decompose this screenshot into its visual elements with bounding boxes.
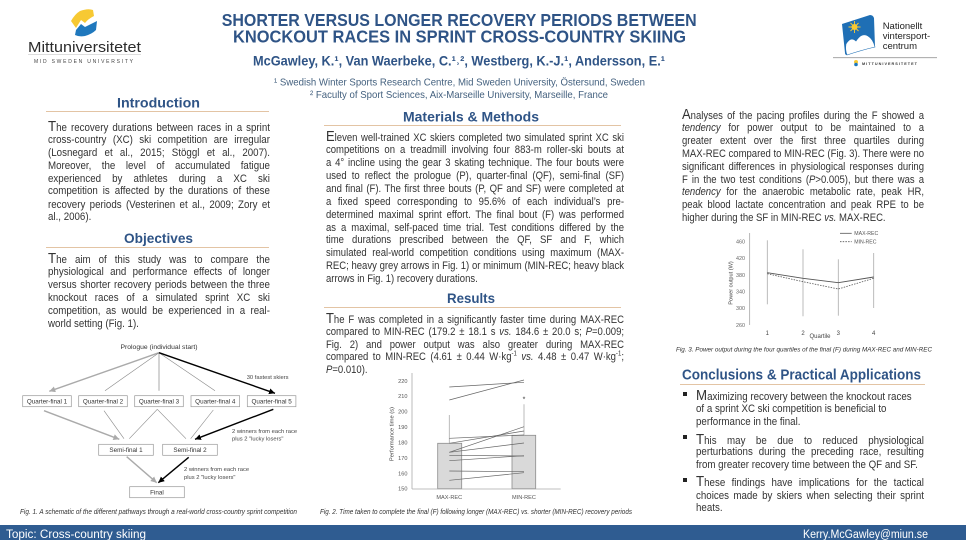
heading: introduction: Introduction	[117, 94, 200, 110]
y axis ticks: 380	[736, 273, 745, 279]
text block: introduction: experienced by athletes during a XC ski	[48, 172, 270, 184]
text block: pacing analysis: tendency for power output to be maintained to a	[682, 122, 924, 134]
individual participant lines	[449, 380, 524, 480]
bullet 1: of a sprint XC ski competition is beneficial to	[696, 403, 886, 415]
x axis labels: 1	[766, 331, 770, 337]
label: winners to semi-finals	[232, 429, 297, 442]
bullet 2: perturbations during the preceding race, resulting	[696, 446, 924, 458]
label: winners to semi-finals: plus 2 "lucky losers"	[232, 436, 283, 442]
bars	[438, 435, 536, 489]
x axis labels: MIN-REC	[512, 495, 536, 501]
legend: MIN-REC	[854, 239, 877, 245]
arrows: semi-finals to final	[127, 457, 189, 483]
text block: pacing analysis: higher during the SF in MIN-REC vs. MAX-REC.	[682, 212, 886, 224]
error bars	[449, 404, 524, 443]
semi-final boxes	[99, 444, 217, 455]
text block: results: P=0.010).	[326, 364, 368, 376]
icon: yellow and blue emblem	[71, 9, 97, 36]
tagline: MID SWEDEN UNIVERSITY	[34, 59, 134, 65]
y axis ticks: 260	[736, 323, 745, 329]
text block: pacing analysis: peak blood lactate concentration and peak RPE to be	[682, 199, 924, 211]
quarter-final labels: Quarter-final 2	[83, 398, 124, 406]
x axis labels: Quartile	[809, 334, 831, 340]
text block: materials and methods: simulated real-world competition conditions using maximum (MAX-	[326, 247, 624, 259]
x axis labels: 2	[801, 331, 805, 337]
text block: introduction: Moreover, the level of accumulated fatigue	[48, 160, 270, 172]
semi-final labels: Semi-final 2	[173, 447, 207, 454]
text block: materials and methods: Eleven well-trained XC skiers completed two simulated sprint XC ski	[326, 128, 624, 145]
header: title, authors and affiliations	[222, 10, 697, 101]
legend: MAX-REC	[854, 231, 878, 237]
affiliations: ² Faculty of Sport Sciences, Aix-Marseille University, Marseille, France	[310, 89, 608, 101]
text block: pacing analysis: greater extent over the first three quartiles during	[682, 135, 924, 147]
y axis ticks: 220	[398, 379, 408, 385]
heading: conclusions: Conclusions & Practical Applications	[682, 368, 921, 384]
title: KNOCKOUT RACES IN SPRINT CROSS-COUNTRY SKIING	[233, 27, 686, 47]
y axis ticks	[398, 379, 408, 493]
label: winners to final: 2 winners from each race	[184, 467, 249, 473]
y axis ticks: 340	[736, 290, 745, 296]
figure 3: power output line chart	[676, 231, 932, 354]
quarter-final boxes	[23, 396, 296, 407]
quarter-final labels: Quarter-final 4	[195, 398, 236, 406]
caption: figure 2: Fig. 2. Time taken to complete the final (F) following longer (MAX-REC) vs. shorter (MIN-REC) recovery periods	[320, 509, 632, 516]
wordmark: centrum	[883, 41, 917, 52]
logo: Mid Sweden University	[28, 9, 141, 65]
bullet 2	[683, 430, 924, 471]
icon: sun over snowy hills	[842, 15, 875, 55]
bullet 2: This may be due to reduced physiological	[696, 430, 924, 448]
text block: introduction: al., 2006).	[48, 211, 91, 223]
text block: materials and methods: determined maximal sprint effort. The final bout (F) was performed	[326, 208, 624, 220]
text block: materials and methods: and final (F). The first three bouts (P, QF and SF) were completed at	[326, 183, 624, 195]
text block: pacing analysis	[682, 106, 924, 224]
text block: materials and methods: REC; heavy grey arrows in Fig. 1) or minimum (MIN-REC; heavy black	[326, 260, 624, 272]
text block: objectives: The aim of this study was to compare the	[48, 250, 270, 267]
quarter-final labels: Quarter-final 5	[251, 398, 292, 406]
bullet 3	[683, 473, 924, 514]
y axis ticks: 200	[398, 410, 408, 416]
panel: introduction	[46, 94, 270, 223]
prologue label: Prologue (individual start)	[120, 344, 198, 351]
affiliations	[274, 76, 645, 101]
text block: objectives	[48, 250, 270, 330]
final box: Final	[150, 490, 164, 497]
y axis ticks: 210	[398, 394, 408, 400]
heading: results: Results	[447, 290, 495, 306]
text block: objectives: versus shorter recovery periods between the three	[48, 279, 270, 291]
text block: materials and methods: time durations prescribed between the QF, SF and F, which	[326, 234, 624, 246]
line: MAX-REC	[767, 273, 874, 283]
panel: materials and methods	[324, 108, 624, 285]
text block: pacing analysis: Analyses of the pacing profiles during the F showed a	[682, 106, 924, 123]
title	[222, 10, 697, 47]
y axis	[749, 233, 751, 325]
line: MIN-REC	[767, 274, 874, 289]
panel: results	[324, 290, 624, 376]
axes	[412, 373, 561, 489]
caption: figure 3: Fig. 3. Power output during the four quartiles of the final (F) during MAX-REC and MIN-REC	[676, 346, 932, 354]
y axis ticks	[736, 240, 745, 329]
affiliations: ¹ Swedish Winter Sports Research Centre, Mid Sweden University, Östersund, Sweden	[274, 76, 645, 88]
quarter-final labels	[27, 398, 292, 406]
text block: materials and methods: a 4° incline using the gear 3 skating technique. The four bouts were	[326, 157, 624, 169]
y axis ticks: 300	[736, 306, 745, 312]
semi-final labels: Semi-final 1	[109, 447, 143, 454]
y axis label: Performance time (s)	[390, 407, 396, 461]
text block: introduction: recovery periods (Vesterinen et al., 2009; Zory et	[48, 198, 270, 210]
text block: objectives: physiological and performance effects of longer	[48, 266, 270, 278]
label: winners to final: plus 2 "lucky losers"	[184, 475, 235, 481]
text block: introduction: The recovery durations between races in a sprint	[48, 118, 270, 135]
significance asterisk: *	[523, 396, 526, 404]
quarter-final labels: Quarter-final 1	[27, 398, 68, 406]
text block: pacing analysis: F in the two test conditions (P>0.005), but there was a	[682, 174, 924, 186]
text block: results	[326, 310, 624, 376]
y axis ticks: 190	[398, 425, 408, 431]
x axis labels: 3	[837, 331, 841, 337]
y axis ticks: 170	[398, 456, 408, 462]
x axis labels	[766, 331, 876, 340]
wordmark	[883, 21, 930, 52]
wordmark: Mittuniversitetet	[28, 40, 141, 56]
text block: results: compared to MIN-REC (4.61 ± 0.44 W·kg-1 vs. 4.48 ± 0.47 W·kg-1;	[326, 351, 624, 363]
x axis labels	[436, 495, 536, 501]
x axis labels: 4	[872, 331, 876, 337]
text block: pacing analysis: tendency for the anaerobic metabolic rate, peak HR,	[682, 186, 924, 198]
bullet 2: from greater recovery time between the QF and SF.	[696, 459, 918, 471]
bullet 3: heats.	[696, 502, 723, 514]
legend	[840, 231, 878, 245]
error bars	[767, 240, 874, 316]
y axis ticks: 180	[398, 440, 408, 446]
text block: introduction: cross-country (XC) ski competition are irregular	[48, 134, 270, 146]
text block: materials and methods: a fixed speed corresponding to 95.6% of each individual’s pre-	[326, 196, 624, 208]
text block: introduction	[48, 118, 270, 223]
label: winners to semi-finals: 2 winners from each race	[232, 429, 297, 435]
text block: pacing analysis: significant differences in physiological responses during	[682, 160, 924, 172]
figure 1: schematic of sprint competition pathways	[20, 344, 297, 516]
text block: materials and methods: arrows in Fig. 1) recovery durations.	[326, 273, 478, 285]
text block: objectives: competition, as would be experienced in a real-	[48, 305, 270, 317]
logo: Nationellt vintersportcentrum	[833, 15, 937, 66]
title: SHORTER VERSUS LONGER RECOVERY PERIODS BETWEEN	[222, 10, 697, 30]
y axis ticks: 420	[736, 256, 745, 262]
text block: introduction: competition is affected by the durations of these	[48, 185, 270, 197]
text block: pacing analysis: MAX-REC compared to MIN-REC (Fig. 3). There were no	[682, 148, 924, 160]
y axis ticks: 160	[398, 471, 408, 477]
heading: materials and methods: Materials & Methods	[403, 108, 539, 124]
semi-final labels	[109, 447, 207, 454]
caption: figure 1: Fig. 1. A schematic of the different pathways through a real-world cross-country sprint competition	[20, 509, 297, 516]
text block: objectives: knockout races of a simulated sprint XC ski	[48, 292, 270, 304]
bullet 1: performance in the final.	[696, 416, 800, 428]
wordmark: vintersport-	[883, 31, 930, 42]
bullet 3: These findings have implications for the tactical	[696, 473, 924, 490]
text block: results: Fig. 2) and power output was also greater during MAX-REC	[326, 338, 624, 350]
text block: introduction: (Losnegard et al., 2015; Stöggl et al., 2007).	[48, 146, 270, 158]
quarter-final labels: Quarter-final 3	[139, 398, 180, 406]
figure 2: performance time bar chart	[320, 373, 632, 516]
label: winners to final	[184, 467, 249, 481]
bullet 1: Maximizing recovery between the knockout races	[696, 387, 912, 404]
text block: materials and methods	[326, 128, 624, 285]
y axis label: Power output (W)	[728, 261, 734, 305]
bullet 1	[683, 387, 912, 428]
wordmark: Nationellt	[883, 21, 923, 32]
text block: results: The F was completed in a significantly faster time during MAX-REC	[326, 310, 624, 327]
text block: materials and methods: competitions on a treadmill involving four 883-m roller-ski bouts at	[326, 144, 624, 156]
panel: objectives	[46, 230, 270, 330]
small Mittuniversitetet mark: MITTUNIVERSITETET	[862, 62, 918, 66]
y axis ticks: 460	[736, 240, 745, 246]
y axis ticks: 150	[398, 487, 408, 493]
authors: McGawley, K.¹, Van Waerbeke, C.¹˒², Westberg, K.-J.¹, Andersson, E.¹	[253, 54, 665, 68]
x axis labels: MAX-REC	[436, 495, 462, 501]
arrows: quarter-finals to semi-finals	[44, 409, 273, 439]
label: 30 fastest skiers: 30 fastest skiers	[247, 375, 289, 381]
panel: conclusions and practical applications	[680, 368, 925, 514]
bullet 3: choices made by skiers when selecting their sprint	[696, 490, 924, 502]
footer bar	[0, 525, 966, 540]
heading: objectives: Objectives	[124, 230, 193, 246]
text block: materials and methods: as a maximal, self-paced time trial. Test conditions differed by the	[326, 222, 624, 234]
final box	[130, 487, 184, 498]
text block: materials and methods: used to reflect the prologue (P), quarter-final (QF), semi-final (SF)	[326, 170, 624, 182]
text block: results: compared to MIN-REC (179.2 ± 18.1 s vs. 184.6 ± 20.0 s; P=0.009;	[326, 326, 624, 338]
arrows: prologue to quarter-finals	[49, 353, 275, 393]
text block: objectives: world setting (Fig. 1).	[48, 318, 139, 330]
